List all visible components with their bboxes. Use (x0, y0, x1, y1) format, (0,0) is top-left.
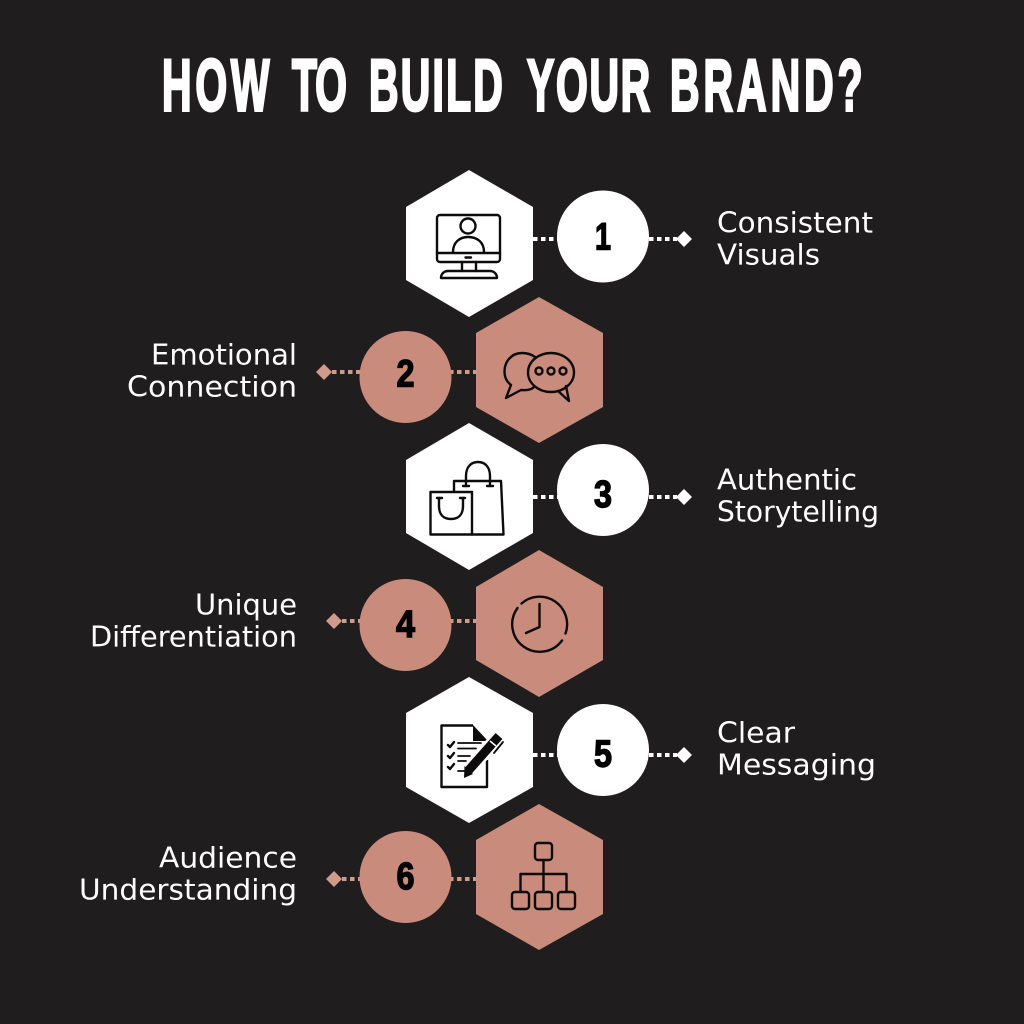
number circle 4 (360, 579, 452, 671)
number circle 5 (557, 704, 649, 796)
icon: clock (512, 597, 567, 652)
number 3: 3 (594, 474, 612, 516)
hexagon 3 (406, 423, 533, 570)
number circle 3 (557, 444, 649, 536)
icon: chat bubbles (504, 353, 574, 401)
icon: video call monitor (437, 215, 500, 278)
icon: org chart (512, 843, 575, 909)
label 5: Clear (717, 716, 795, 750)
label 2: Connection (127, 370, 297, 404)
step 1: consistent visuals (406, 170, 873, 317)
label 4 (90, 588, 297, 654)
diamond 3 (676, 489, 692, 505)
diamond 2 (316, 364, 332, 380)
label 5 (717, 716, 876, 782)
label 4: Differentiation (90, 620, 297, 654)
label 6 (79, 842, 297, 906)
step 5: clear messaging (406, 677, 876, 823)
step 2: emotional connection (127, 297, 603, 443)
diamond 4 (326, 613, 342, 629)
label 3: Authentic (717, 464, 857, 496)
number circle 6 (360, 831, 452, 923)
number 5: 5 (594, 734, 612, 776)
title: HOW (162, 44, 270, 127)
label 1: Visuals (717, 238, 820, 272)
label 3 (717, 464, 879, 528)
number circle 2 (360, 331, 452, 423)
hexagon 6 (476, 804, 603, 950)
step 4: unique differentiation (90, 550, 603, 697)
label 6: Audience (159, 842, 297, 874)
label 2 (127, 338, 297, 404)
title: BRAND? (670, 44, 863, 127)
hexagon 4 (476, 550, 603, 697)
diamond 1 (676, 231, 692, 247)
label 1 (717, 206, 873, 272)
title (162, 44, 863, 127)
icon: checklist and pen (442, 725, 503, 787)
number circle 1 (557, 190, 649, 282)
hexagon 5 (406, 677, 533, 823)
label 5: Messaging (717, 748, 876, 782)
number 6: 6 (396, 856, 414, 898)
step 6: audience understanding (79, 804, 603, 950)
hexagon 1 (406, 170, 533, 317)
title: TO (292, 44, 347, 127)
number 4: 4 (396, 604, 415, 646)
icon: shopping bags (430, 462, 504, 534)
title: YOUR (527, 44, 650, 127)
label 6: Understanding (79, 874, 297, 906)
hexagon 2 (476, 297, 603, 443)
number 1: 1 (595, 216, 611, 258)
diamond 5 (676, 747, 692, 763)
label 3: Storytelling (717, 496, 879, 528)
label 1: Consistent (717, 206, 873, 240)
diamond 6 (326, 871, 342, 887)
title: BUILD (369, 44, 503, 127)
label 2: Emotional (151, 338, 297, 372)
label 4: Unique (195, 588, 297, 622)
step 3: authentic storytelling (406, 423, 879, 570)
number 2: 2 (396, 354, 414, 396)
